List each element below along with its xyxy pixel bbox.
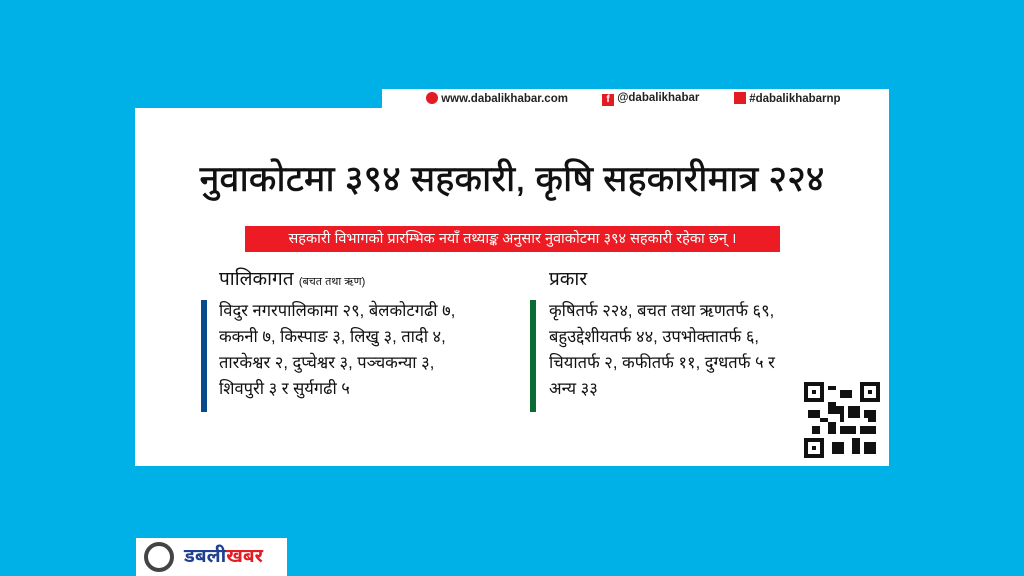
right bar [530,300,536,412]
heading: palikagat: पालिकागत (बचत तथा ऋण) [219,269,365,290]
logo text: डबलीखबर [184,546,263,567]
text: prakar: कृषितर्फ २२४, बचत तथा ऋणतर्फ ६९, [549,302,774,320]
facebook: @dabalikhabar [617,92,699,104]
main panel [135,108,889,466]
text: palikagat: विदुर नगरपालिकामा २९, बेलकोटगढी ७, [219,302,455,320]
heading: prakar: प्रकार [549,269,587,290]
social strip [382,89,889,109]
text: palikagat: तारकेश्वर २, दुप्चेश्वर ३, पञ्चकन्या ३, [219,354,434,372]
text: prakar: अन्य ३३ [549,380,598,398]
icon: QR code [804,382,880,458]
twitter: #dabalikhabarnp [749,93,841,105]
red subtitle banner [245,226,780,252]
website: www.dabalikhabar.com [441,93,568,105]
red subtitle banner: सहकारी विभागको प्रारम्भिक नयाँ तथ्याङ्क अनुसार नुवाकोटमा ३९४ सहकारी रहेका छन् । [288,231,737,247]
text: prakar: बहुउद्देशीयतर्फ ४४, उपभोक्तातर्फ ६, [549,328,759,346]
title: नुवाकोटमा ३९४ सहकारी, कृषि सहकारीमात्र २२४ [199,158,825,199]
text: prakar [549,301,776,398]
text: palikagat: ककनी ७, किस्पाङ ३, लिखु ३, तादी ४, [219,328,446,346]
logo [136,538,287,576]
text: palikagat [219,300,455,398]
text: prakar: चियातर्फ २, कफीतर्फ ११, दुग्धतर्फ ५ र [549,354,775,372]
text: palikagat: शिवपुरी ३ र सुर्यगढी ५ [219,380,350,398]
facebook: f [606,94,610,105]
left bar [201,300,207,412]
icon: logo ring [144,542,174,572]
